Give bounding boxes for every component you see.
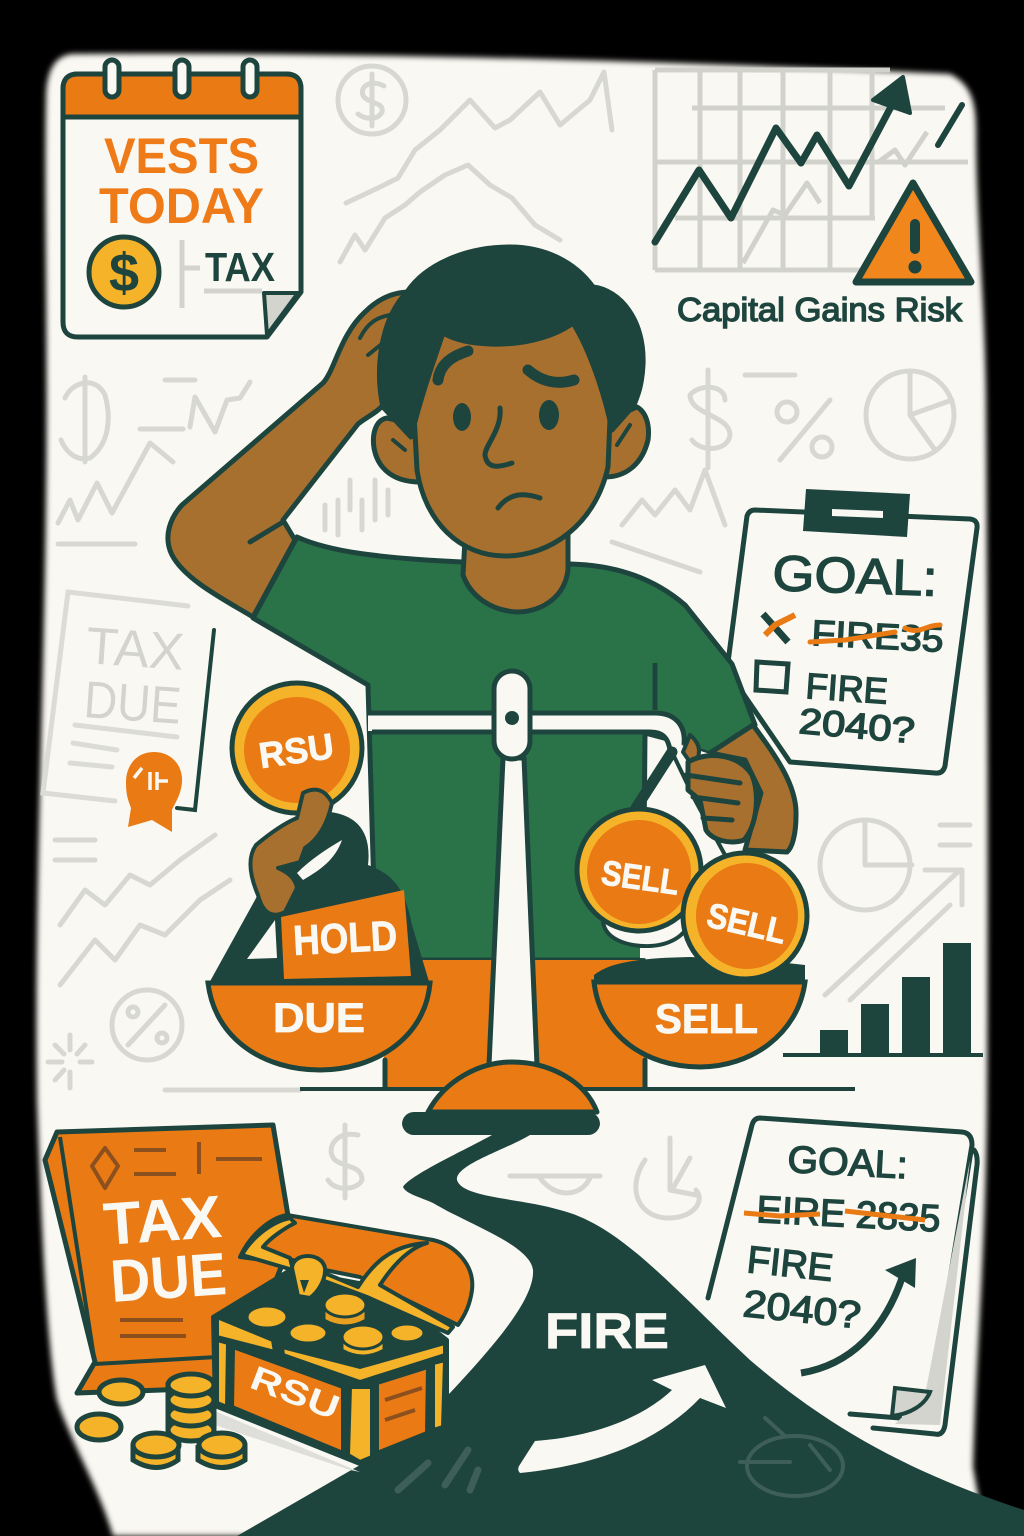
scale beam bbox=[368, 714, 684, 747]
right chain and hand bbox=[636, 735, 756, 855]
sell coin one bbox=[577, 809, 701, 931]
faint turtle doodle bbox=[740, 1418, 843, 1496]
calendar heading line two: TODAY bbox=[99, 178, 264, 234]
bar chart bbox=[783, 943, 983, 1057]
goal heading: GOAL: bbox=[772, 545, 938, 607]
eyes bbox=[453, 400, 559, 431]
panel: revised goal sheet bbox=[708, 1118, 977, 1434]
sheet new year: 2040? bbox=[741, 1283, 863, 1337]
sheet old goal: EIRE 2835 bbox=[756, 1189, 941, 1241]
right scale pan bbox=[594, 915, 805, 1067]
arrow head bbox=[873, 77, 910, 113]
face bbox=[408, 300, 615, 556]
floor line bbox=[300, 1087, 855, 1091]
eyebrows bbox=[438, 351, 574, 382]
left hanger and hold weight bbox=[208, 812, 430, 985]
chest interior bbox=[213, 1270, 447, 1464]
capital gains chart line bbox=[655, 77, 962, 242]
sell coin two bbox=[683, 853, 807, 979]
balance scale bbox=[368, 671, 684, 1112]
sheet goal heading: GOAL: bbox=[787, 1139, 909, 1187]
shorts bbox=[380, 960, 645, 1088]
ears bbox=[373, 407, 649, 482]
scale post bbox=[489, 758, 537, 1065]
chest lid bbox=[240, 1215, 472, 1325]
chest rims bbox=[217, 1317, 445, 1382]
book title: TAX bbox=[101, 1183, 224, 1258]
book subtitle: DUE bbox=[108, 1240, 229, 1315]
panel: vesting calendar bbox=[63, 60, 301, 337]
faded tax due document: TAX bbox=[84, 617, 186, 682]
treasure chest bbox=[200, 1215, 472, 1472]
panel: goal clipboard bbox=[727, 489, 977, 773]
right scale pan: SELL bbox=[655, 995, 758, 1042]
empty checkbox bbox=[756, 662, 788, 692]
lid straps bbox=[242, 1218, 453, 1333]
RSU coin bbox=[232, 683, 362, 813]
chest lock bbox=[292, 1256, 325, 1298]
scale dome base bbox=[428, 1062, 597, 1112]
road to FIRE bbox=[237, 1112, 1024, 1536]
RSU coin: RSU bbox=[256, 725, 336, 776]
chest posts bbox=[217, 1340, 445, 1462]
shirt bbox=[253, 537, 755, 960]
sheet new goal: FIRE bbox=[745, 1239, 835, 1290]
faded tax due document bbox=[43, 592, 214, 832]
left hanger and hold weight: HOLD bbox=[292, 912, 398, 964]
tax label: TAX bbox=[205, 244, 275, 290]
rising arrow bbox=[801, 1258, 916, 1373]
chest front panel bbox=[232, 1347, 343, 1453]
sell coin one: SELL bbox=[599, 853, 682, 903]
gold coins in chest bbox=[247, 1293, 424, 1356]
dollar coin icon bbox=[89, 237, 159, 307]
loose gold coins bbox=[77, 1374, 245, 1468]
gray chart grid bbox=[655, 70, 968, 270]
nose and mouth bbox=[485, 408, 540, 508]
faint road marks bbox=[398, 1418, 843, 1496]
neck bbox=[463, 535, 568, 612]
sleeve and forearm overlap bbox=[650, 605, 796, 852]
chest shadow bbox=[200, 1412, 360, 1472]
hair bbox=[380, 247, 643, 437]
faded tax due document: DUE bbox=[82, 671, 183, 736]
fire label on road: FIRE bbox=[545, 1303, 669, 1359]
chest side panel bbox=[377, 1367, 428, 1453]
capital gains label: Capital Gains Risk bbox=[677, 291, 963, 328]
dollar coin icon: $ bbox=[109, 243, 139, 303]
sell coin two: SELL bbox=[703, 896, 790, 952]
orange seal bbox=[126, 752, 182, 832]
tax due book bbox=[45, 1125, 292, 1393]
calendar heading: VESTS bbox=[104, 128, 259, 184]
left hand bbox=[250, 790, 332, 915]
new goal text: FIRE bbox=[804, 665, 889, 712]
person: arm behind head and torso bbox=[168, 247, 755, 1088]
left scale pan bbox=[208, 983, 430, 1070]
warning triangle icon bbox=[856, 183, 971, 282]
crossed out goal bbox=[763, 612, 945, 660]
chest label: RSU bbox=[245, 1359, 345, 1427]
crossed out goal: FIRE35 bbox=[811, 612, 945, 660]
left scale pan: DUE bbox=[273, 994, 365, 1041]
new goal year: 2040? bbox=[797, 700, 916, 751]
road arrow bbox=[518, 1365, 726, 1473]
hold tag bbox=[281, 890, 411, 979]
raised arm bbox=[168, 292, 410, 617]
